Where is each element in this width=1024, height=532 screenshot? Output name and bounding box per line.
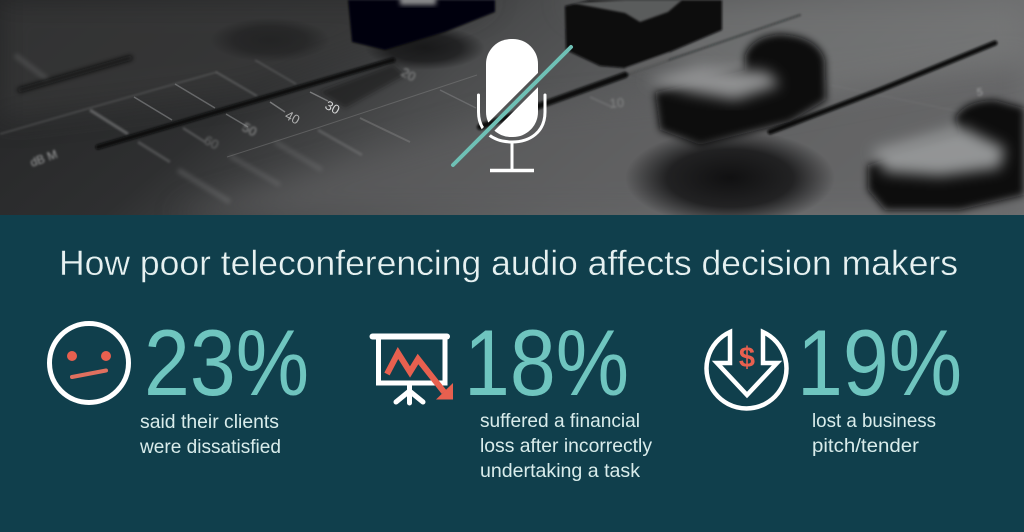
fader knob centre [565, 0, 722, 68]
text: lost a business pitch/tender: pitch/tender [812, 435, 920, 457]
photo: mixing desk faders [0, 0, 1024, 226]
text: lost a business pitch/tender: lost a business [812, 410, 936, 432]
fader scale numbers: 40 [283, 107, 302, 127]
text: suffered a financial loss after incorrectly undertaking a task: suffered a financial [480, 410, 640, 432]
text: said their clients were dissatisfied: were dissatisfied [139, 436, 281, 458]
icon: presentation board with falling chart [372, 336, 453, 403]
panel: 23 percent clients dissatisfied [50, 310, 309, 458]
fader slots [20, 15, 995, 147]
text: said their clients were dissatisfied: said their clients [140, 411, 279, 433]
icon: down arrow with dollar in circle [706, 332, 786, 408]
fader scale numbers: 60 [202, 132, 221, 152]
fader scale numbers: 20 [399, 64, 418, 84]
fader scale numbers [28, 64, 983, 170]
fader knob blurred middle [655, 34, 826, 145]
text: suffered a financial loss after incorrectly undertaking a task: undertaking a task [480, 460, 640, 482]
fader knob top left [348, 0, 495, 50]
icon: muted microphone [453, 39, 571, 170]
fader scale numbers: dB M [28, 147, 59, 170]
fader scale numbers: 30 [323, 97, 342, 117]
text: suffered a financial loss after incorrectly undertaking a task: loss after incorrectly [480, 435, 652, 457]
icon: down arrow with dollar in circle: $ [739, 342, 755, 374]
fader knob blurred right [868, 100, 1024, 210]
statistic: 18%: 18% [464, 310, 629, 415]
panel: 18 percent financial loss [372, 310, 657, 482]
soft shadows on the desk [372, 31, 480, 68]
panel: 19 percent lost pitch [706, 310, 962, 457]
statistic: 19%: 19% [797, 310, 962, 415]
statistic: 23%: 23% [144, 310, 309, 415]
dark patch behind fader scale [320, 64, 405, 108]
title: How poor teleconferencing audio affects decision makers [59, 243, 958, 283]
fader scale numbers: 10 [609, 95, 625, 111]
fader scale numbers: 50 [240, 119, 259, 139]
fader scale numbers: 5 [976, 87, 983, 99]
icon: unhappy face [50, 324, 128, 402]
panel: statistics background [0, 215, 1024, 532]
